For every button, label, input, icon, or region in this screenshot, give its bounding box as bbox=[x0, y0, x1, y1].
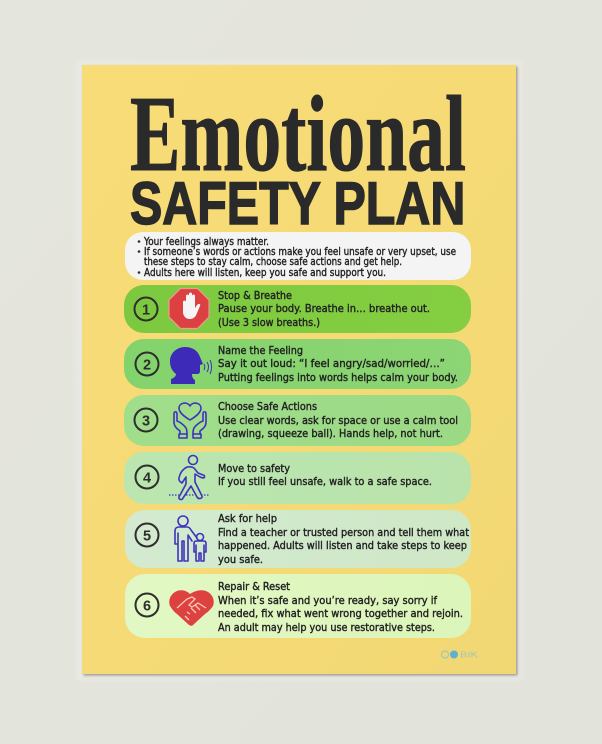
panel: step 3 choose safe actions: Choose Safe Actions bbox=[218, 400, 317, 413]
logo watermark: BIK bbox=[460, 650, 479, 660]
panel: step 5 ask for help bbox=[125, 510, 471, 568]
panel: step 6 repair and reset: needed, fix what went wrong together and rejoin. bbox=[218, 607, 463, 620]
panel: step 1 stop and breathe bbox=[124, 285, 471, 333]
icon: walking person bbox=[169, 456, 210, 500]
panel: step 2 name the feeling bbox=[124, 339, 471, 389]
panel: step 3 choose safe actions: (drawing, squeeze ball). Hands help, not hurt. bbox=[218, 427, 443, 440]
subtitle: Safety Plan: SAFETY PLAN bbox=[130, 170, 465, 237]
number 6 bbox=[136, 594, 158, 616]
panel: step 3 choose safe actions: Use clear words, ask for space or use a calm tool bbox=[218, 414, 458, 427]
panel: introduction: If someone’s words or actions make you feel unsafe or very upset, use bbox=[144, 245, 456, 258]
panel: step 5 ask for help: happened. Adults will listen and take steps to keep bbox=[218, 539, 467, 552]
number 1: 1 bbox=[142, 302, 150, 318]
panel: step 4 move to safety: If you still feel unsafe, walk to a safe space. bbox=[218, 475, 432, 488]
panel: step 2 name the feeling: Putting feelings into words helps calm your body. bbox=[218, 371, 458, 384]
icon: stop sign with hand bbox=[169, 288, 209, 328]
icon: adult and child bbox=[175, 516, 206, 561]
title: Emotional: Emotional bbox=[130, 75, 466, 194]
logo watermark bbox=[442, 650, 479, 660]
panel: step 2 name the feeling: Name the Feeling bbox=[218, 344, 303, 357]
number 4 bbox=[136, 466, 158, 488]
panel: step 4 move to safety bbox=[124, 452, 471, 504]
panel: introduction: Your feelings always matter. bbox=[143, 235, 269, 248]
number 1 bbox=[134, 298, 158, 320]
icon: hands holding heart bbox=[174, 403, 206, 438]
number 2 bbox=[136, 352, 158, 376]
number 6: 6 bbox=[143, 598, 151, 614]
poster bbox=[82, 65, 516, 674]
panel: introduction: these steps to stay calm, choose safe actions and get help. bbox=[144, 255, 402, 268]
number 5: 5 bbox=[143, 528, 151, 544]
number 3 bbox=[134, 408, 158, 432]
panel: step 4 move to safety: Move to safety bbox=[218, 462, 291, 475]
icon: speaking head bbox=[170, 347, 212, 384]
panel: step 1 stop and breathe: Stop & Breathe bbox=[218, 289, 292, 302]
number 3: 3 bbox=[142, 414, 150, 430]
icon: heart with handshake bbox=[169, 590, 214, 626]
panel: introduction: Adults here will listen, keep you safe and support you. bbox=[144, 266, 386, 279]
panel: step 5 ask for help: Ask for help bbox=[218, 512, 277, 525]
panel: step 3 choose safe actions bbox=[124, 395, 471, 446]
panel: step 6 repair and reset bbox=[125, 574, 471, 638]
panel: step 5 ask for help: you safe. bbox=[218, 553, 263, 566]
number 4: 4 bbox=[143, 470, 151, 486]
panel: introduction bbox=[125, 232, 471, 280]
panel: step 6 repair and reset: Repair & Reset bbox=[218, 580, 290, 593]
panel: step 5 ask for help: Find a teacher or trusted person and tell them what bbox=[218, 526, 469, 539]
panel: step 6 repair and reset: An adult may help you use restorative steps. bbox=[218, 621, 435, 634]
panel: step 1 stop and breathe: Pause your body. Breathe in… breathe out. bbox=[218, 302, 430, 315]
number 5 bbox=[136, 524, 158, 546]
panel: step 2 name the feeling: Say it out loud: “I feel angry/sad/worried/…” bbox=[218, 357, 445, 370]
panel: step 1 stop and breathe: (Use 3 slow breaths.) bbox=[218, 316, 320, 329]
panel: step 6 repair and reset: When it’s safe and you’re ready, say sorry if bbox=[218, 594, 437, 607]
number 2: 2 bbox=[143, 358, 151, 374]
